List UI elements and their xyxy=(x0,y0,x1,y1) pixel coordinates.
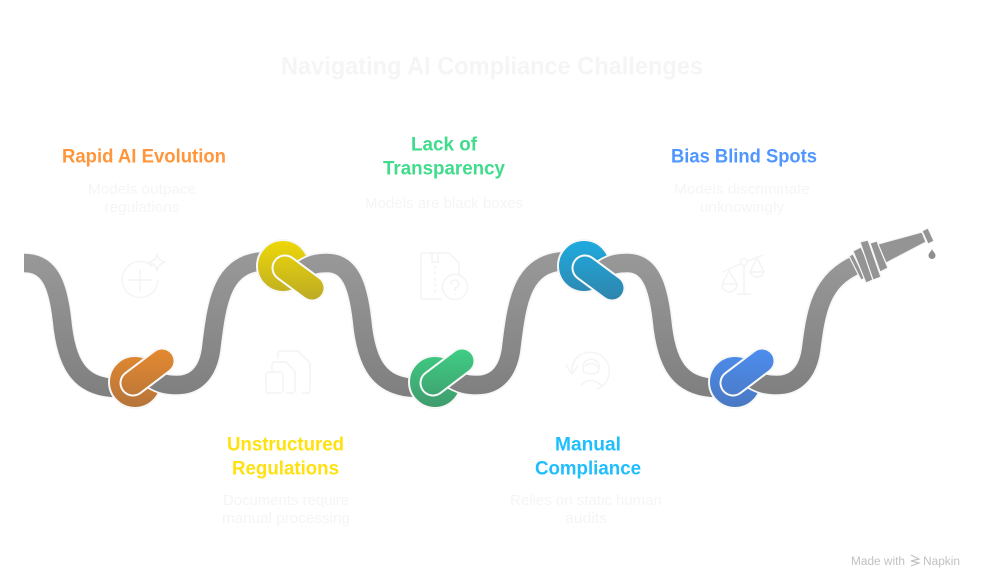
water drop xyxy=(928,249,936,259)
icon: circle plus with sparkle xyxy=(122,254,165,297)
hose nozzle xyxy=(849,228,934,283)
step: Unstructured Regulations xyxy=(222,351,350,527)
description xyxy=(674,181,810,216)
knot pill: orange xyxy=(133,361,162,383)
step: Lack of Transparency xyxy=(365,134,523,300)
heading xyxy=(535,434,641,480)
step: Manual Compliance xyxy=(510,352,662,527)
icon: zipped document with question mark xyxy=(421,253,468,300)
title: Navigating AI Compliance Challenges xyxy=(281,52,703,80)
icon: Napkin logo xyxy=(911,555,919,566)
hose segment 5 xyxy=(600,263,718,388)
heading xyxy=(227,434,344,480)
watermark: Made with Napkin xyxy=(851,555,960,568)
knot pill: blue xyxy=(733,361,762,383)
knot circle: blue xyxy=(709,356,761,408)
description: Models are black boxes xyxy=(365,195,523,212)
step: Bias Blind Spots xyxy=(671,146,817,294)
icon: balance scale xyxy=(722,255,764,294)
heading xyxy=(383,134,505,180)
heading: Manual xyxy=(555,434,621,456)
description: manual processing xyxy=(222,510,350,527)
heading: Unstructured xyxy=(227,434,344,456)
hose segment 6 xyxy=(750,264,858,385)
watermark: Made with Napkin: Made with xyxy=(851,556,905,568)
hose segment 2 xyxy=(150,261,268,385)
hose segment 1 xyxy=(24,263,118,388)
hose segment 4 xyxy=(450,261,568,385)
knot pill: cyan xyxy=(585,268,612,288)
hose segment 3 xyxy=(300,263,418,388)
knot circle: yellow xyxy=(257,240,309,292)
heading: Regulations xyxy=(232,458,339,480)
heading: Lack of xyxy=(411,134,477,156)
knot circle: orange xyxy=(109,356,161,408)
description: Models discriminate xyxy=(674,181,810,198)
heading: Compliance xyxy=(535,458,641,480)
heading: Bias Blind Spots xyxy=(671,146,817,168)
description: unknowingly xyxy=(700,199,784,216)
step: Rapid AI Evolution xyxy=(62,146,226,297)
description xyxy=(222,492,350,527)
description xyxy=(510,492,662,527)
description: regulations xyxy=(104,199,180,216)
description: Documents require xyxy=(223,492,349,509)
knot pill: green xyxy=(433,361,462,383)
description: Relies on static human xyxy=(510,492,662,509)
description: audits xyxy=(565,510,607,527)
knot circle: cyan xyxy=(558,240,610,292)
description: Models outpace xyxy=(88,181,196,198)
heading: Transparency xyxy=(383,158,505,180)
description xyxy=(88,181,196,216)
hose and knots xyxy=(24,228,936,408)
icon: auditor in cycle arrow xyxy=(566,352,609,389)
watermark: Made with Napkin: Napkin xyxy=(923,556,960,568)
heading: Rapid AI Evolution xyxy=(62,146,226,168)
knot circle: green xyxy=(409,356,461,408)
icon: stacked documents xyxy=(266,351,310,393)
knot pill: yellow xyxy=(285,268,312,288)
